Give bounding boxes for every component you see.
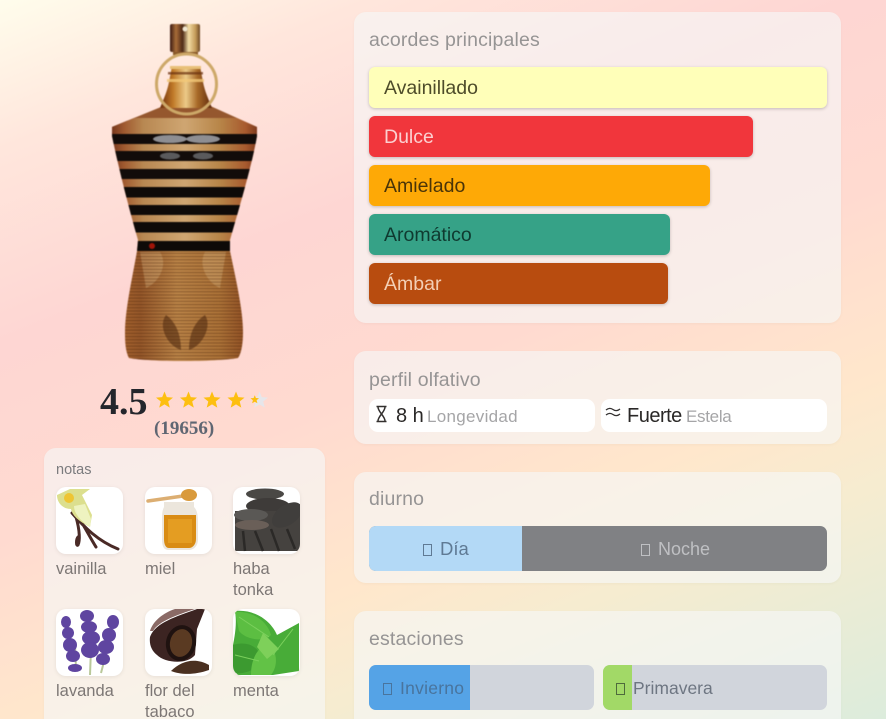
day segment	[369, 526, 522, 571]
panel: diurno	[354, 472, 841, 583]
perfume bottle	[111, 23, 258, 362]
review count: (19656)	[154, 418, 214, 439]
note: haba tonka	[232, 487, 300, 599]
sillage pill	[601, 399, 827, 432]
note: flor del tabaco: flor del	[145, 682, 195, 700]
accord bar: Dulce: Dulce	[384, 126, 434, 148]
season bar: Primavera	[603, 665, 827, 710]
rating stars	[156, 392, 268, 408]
note: vainilla	[56, 487, 124, 578]
rating value: 4.5	[100, 381, 148, 423]
season bar: Invierno	[369, 665, 594, 710]
season bar: Invierno: Invierno	[400, 678, 464, 698]
sillage pill: Fuerte	[627, 405, 682, 427]
accord bar: Dulce	[369, 116, 753, 157]
icon: hourglass	[376, 406, 386, 422]
accord bar: Ámbar: Ámbar	[384, 273, 441, 295]
icon: waves	[606, 408, 620, 416]
note: miel	[144, 487, 212, 578]
sillage pill: Estela	[686, 407, 731, 426]
note: menta	[232, 609, 300, 700]
panel: perfil olfativo	[354, 351, 841, 444]
notas heading: notas	[56, 462, 91, 478]
longevity pill	[369, 399, 595, 432]
accord bar: Aromático	[369, 214, 670, 255]
season bar: Primavera: Primavera	[633, 678, 713, 698]
note: menta: menta	[233, 682, 279, 700]
note: lavanda: lavanda	[56, 682, 114, 700]
longevity pill: Longevidad	[427, 407, 518, 426]
accord bar: Amielado	[369, 165, 710, 206]
acordes heading: acordes principales	[369, 29, 540, 51]
note: haba tonka: haba	[233, 560, 270, 578]
night segment: Noche	[658, 539, 710, 559]
accord bar: Ámbar	[369, 263, 668, 304]
note: miel: miel	[145, 560, 175, 578]
accord bar: Amielado: Amielado	[384, 175, 465, 197]
accord bar: Aromático: Aromático	[384, 224, 472, 246]
note: vainilla: vainilla	[56, 560, 106, 578]
note: haba tonka: tonka	[233, 581, 273, 599]
longevity pill: 8 h	[396, 405, 424, 427]
panel: estaciones	[354, 611, 841, 719]
accord bar: Avainillado: Avainillado	[384, 77, 478, 99]
day segment: Día	[440, 538, 469, 559]
estaciones heading: estaciones	[369, 628, 464, 650]
rating	[100, 381, 268, 439]
perfil heading: perfil olfativo	[369, 369, 481, 391]
note: flor del tabaco	[144, 609, 212, 719]
panel: acordes principales	[354, 12, 841, 323]
diurno heading: diurno	[369, 488, 424, 510]
accord bar: Avainillado	[369, 67, 827, 108]
panel: notas	[44, 448, 325, 719]
day/night bar	[369, 526, 827, 571]
note: lavanda	[56, 609, 124, 700]
